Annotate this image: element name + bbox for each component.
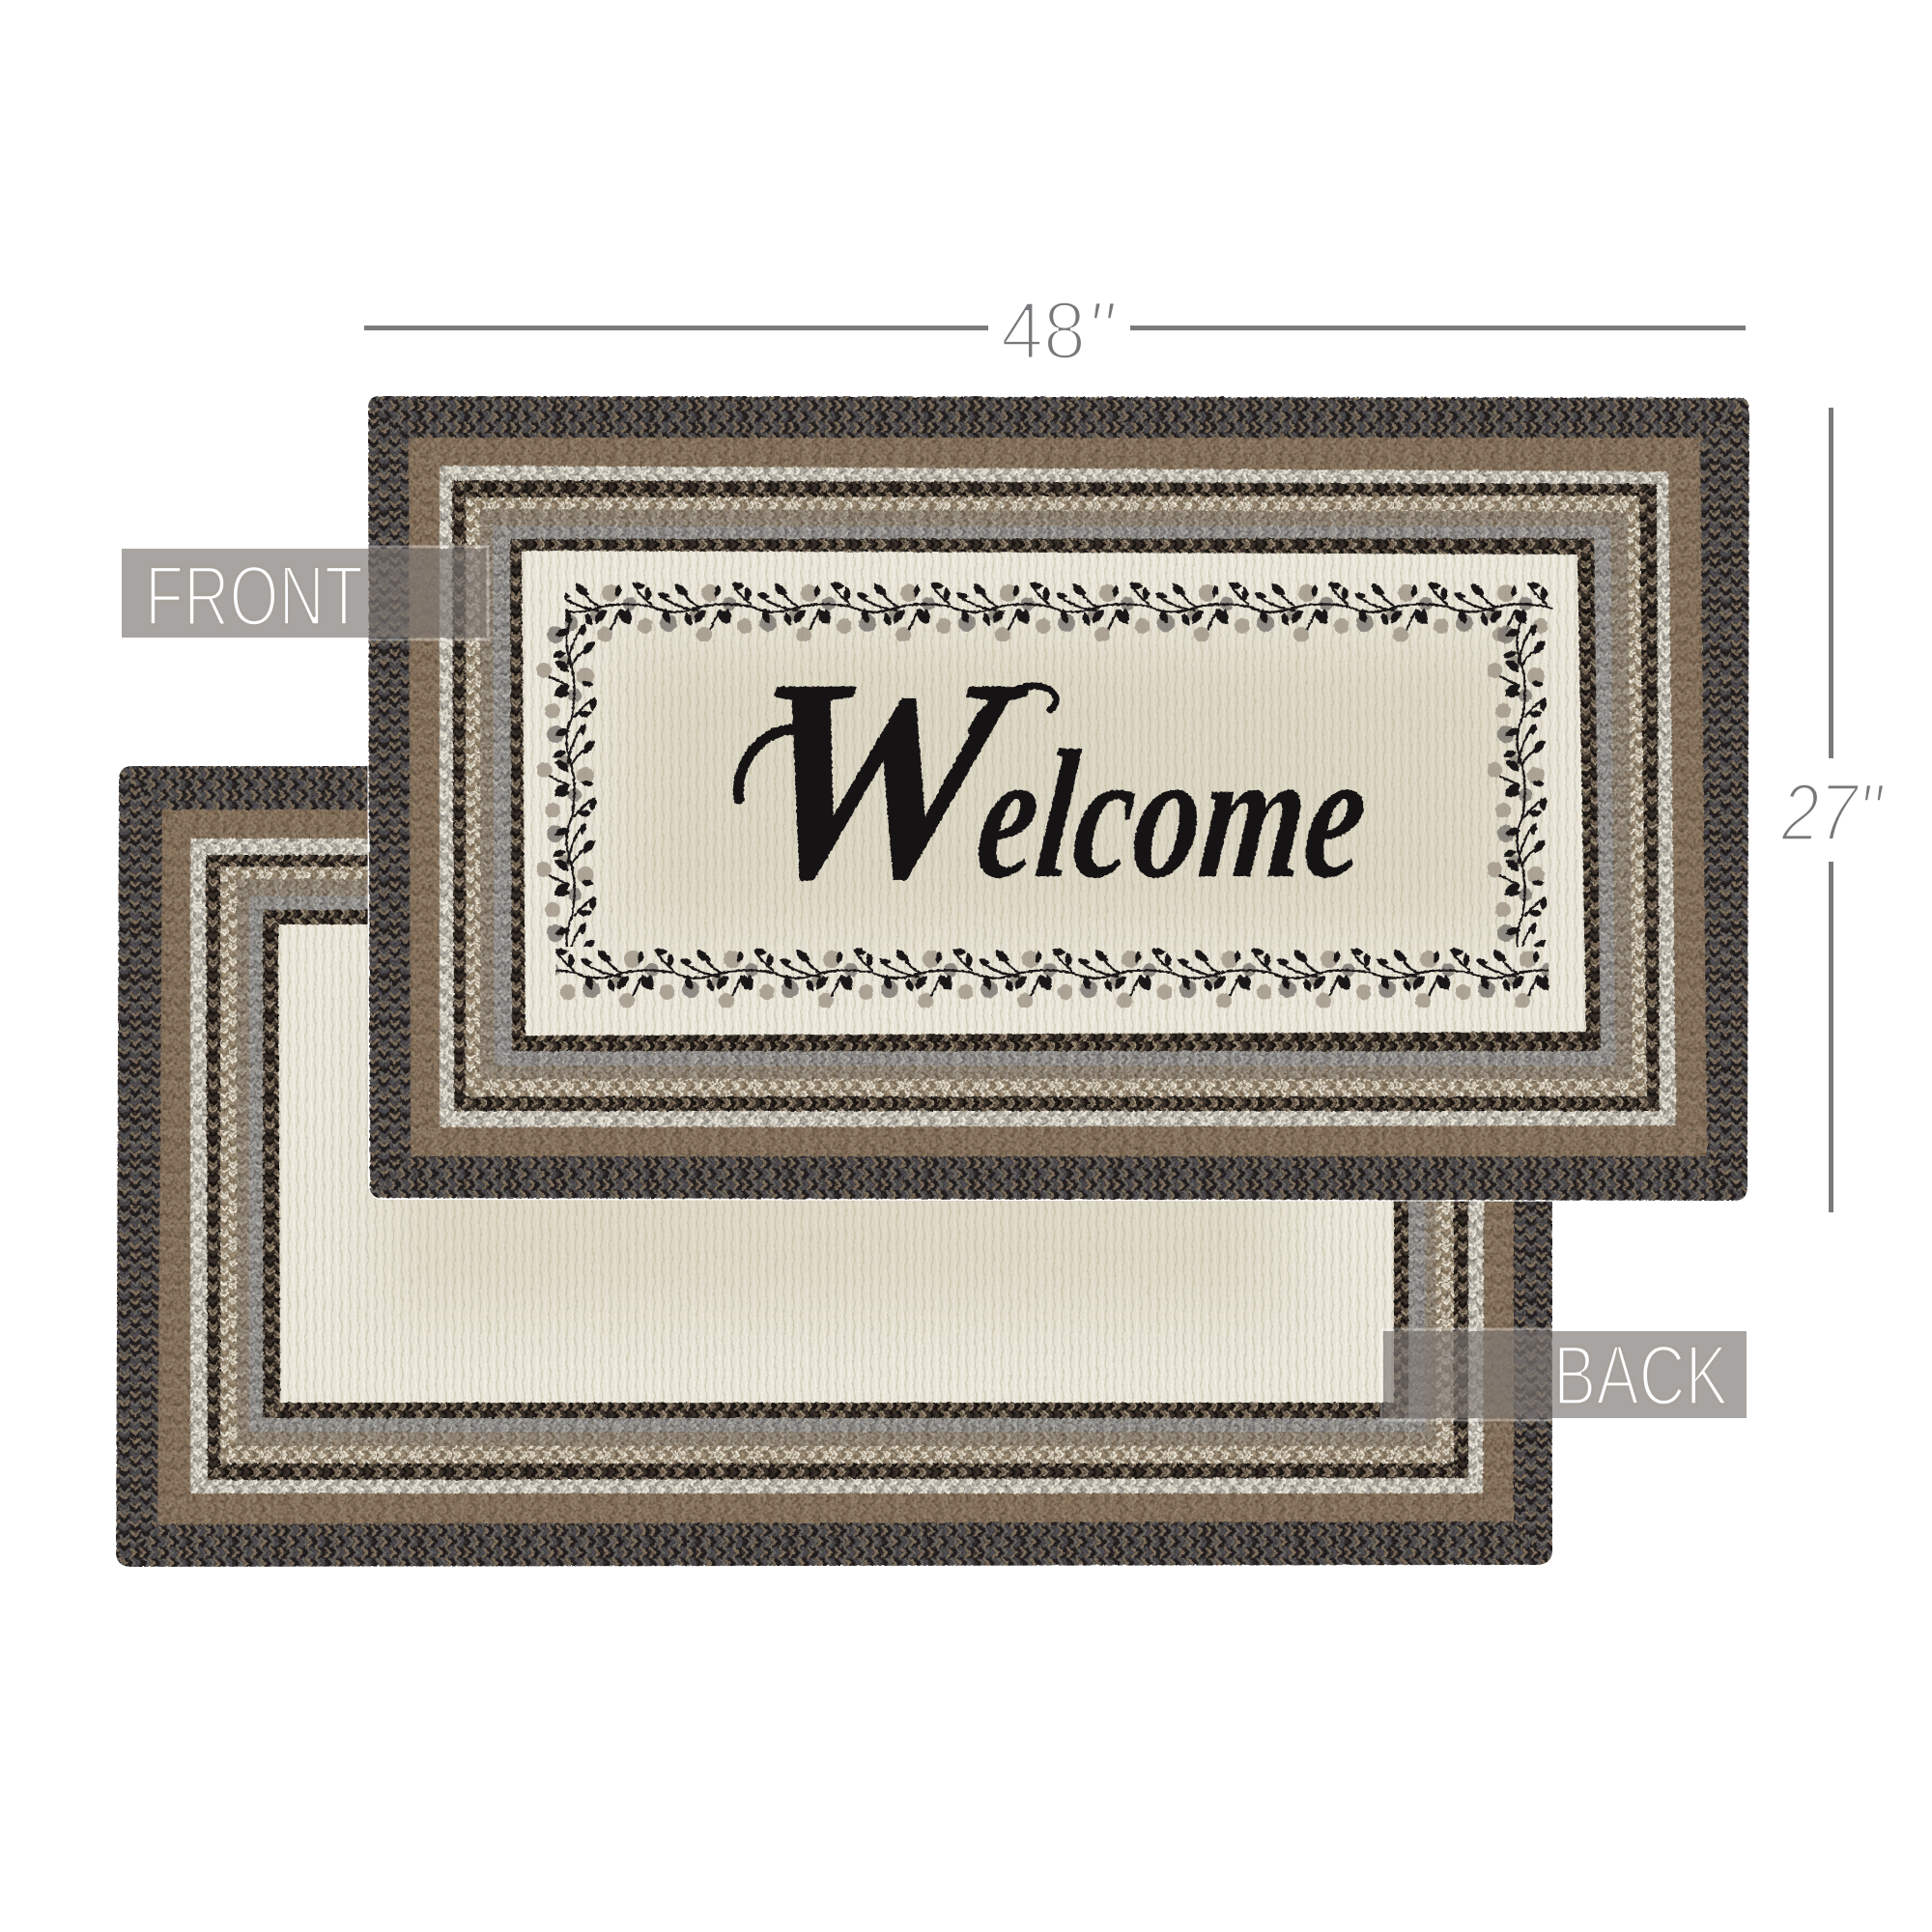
- front rug edge halo: [368, 396, 1749, 1201]
- floral vine border: [537, 572, 1557, 1008]
- rug lettering: Welcome: elcome: [969, 714, 1377, 917]
- height dimension: 27 inches: 27": [1780, 767, 1885, 858]
- width dimension: 48 inches: 48": [1001, 285, 1116, 376]
- label: FRONT: FRONT: [145, 548, 363, 643]
- back rug: [116, 766, 1552, 1567]
- label: BACK: BACK: [1553, 1327, 1728, 1423]
- width dimension: 48 inches: [364, 285, 1746, 376]
- height dimension: 27 inches: [1780, 408, 1885, 1212]
- label: BACK: [1381, 1327, 1748, 1423]
- rug lettering: Welcome: W: [728, 619, 1038, 940]
- rug lettering: Welcome: [728, 619, 1377, 940]
- front rug: [368, 396, 1749, 1201]
